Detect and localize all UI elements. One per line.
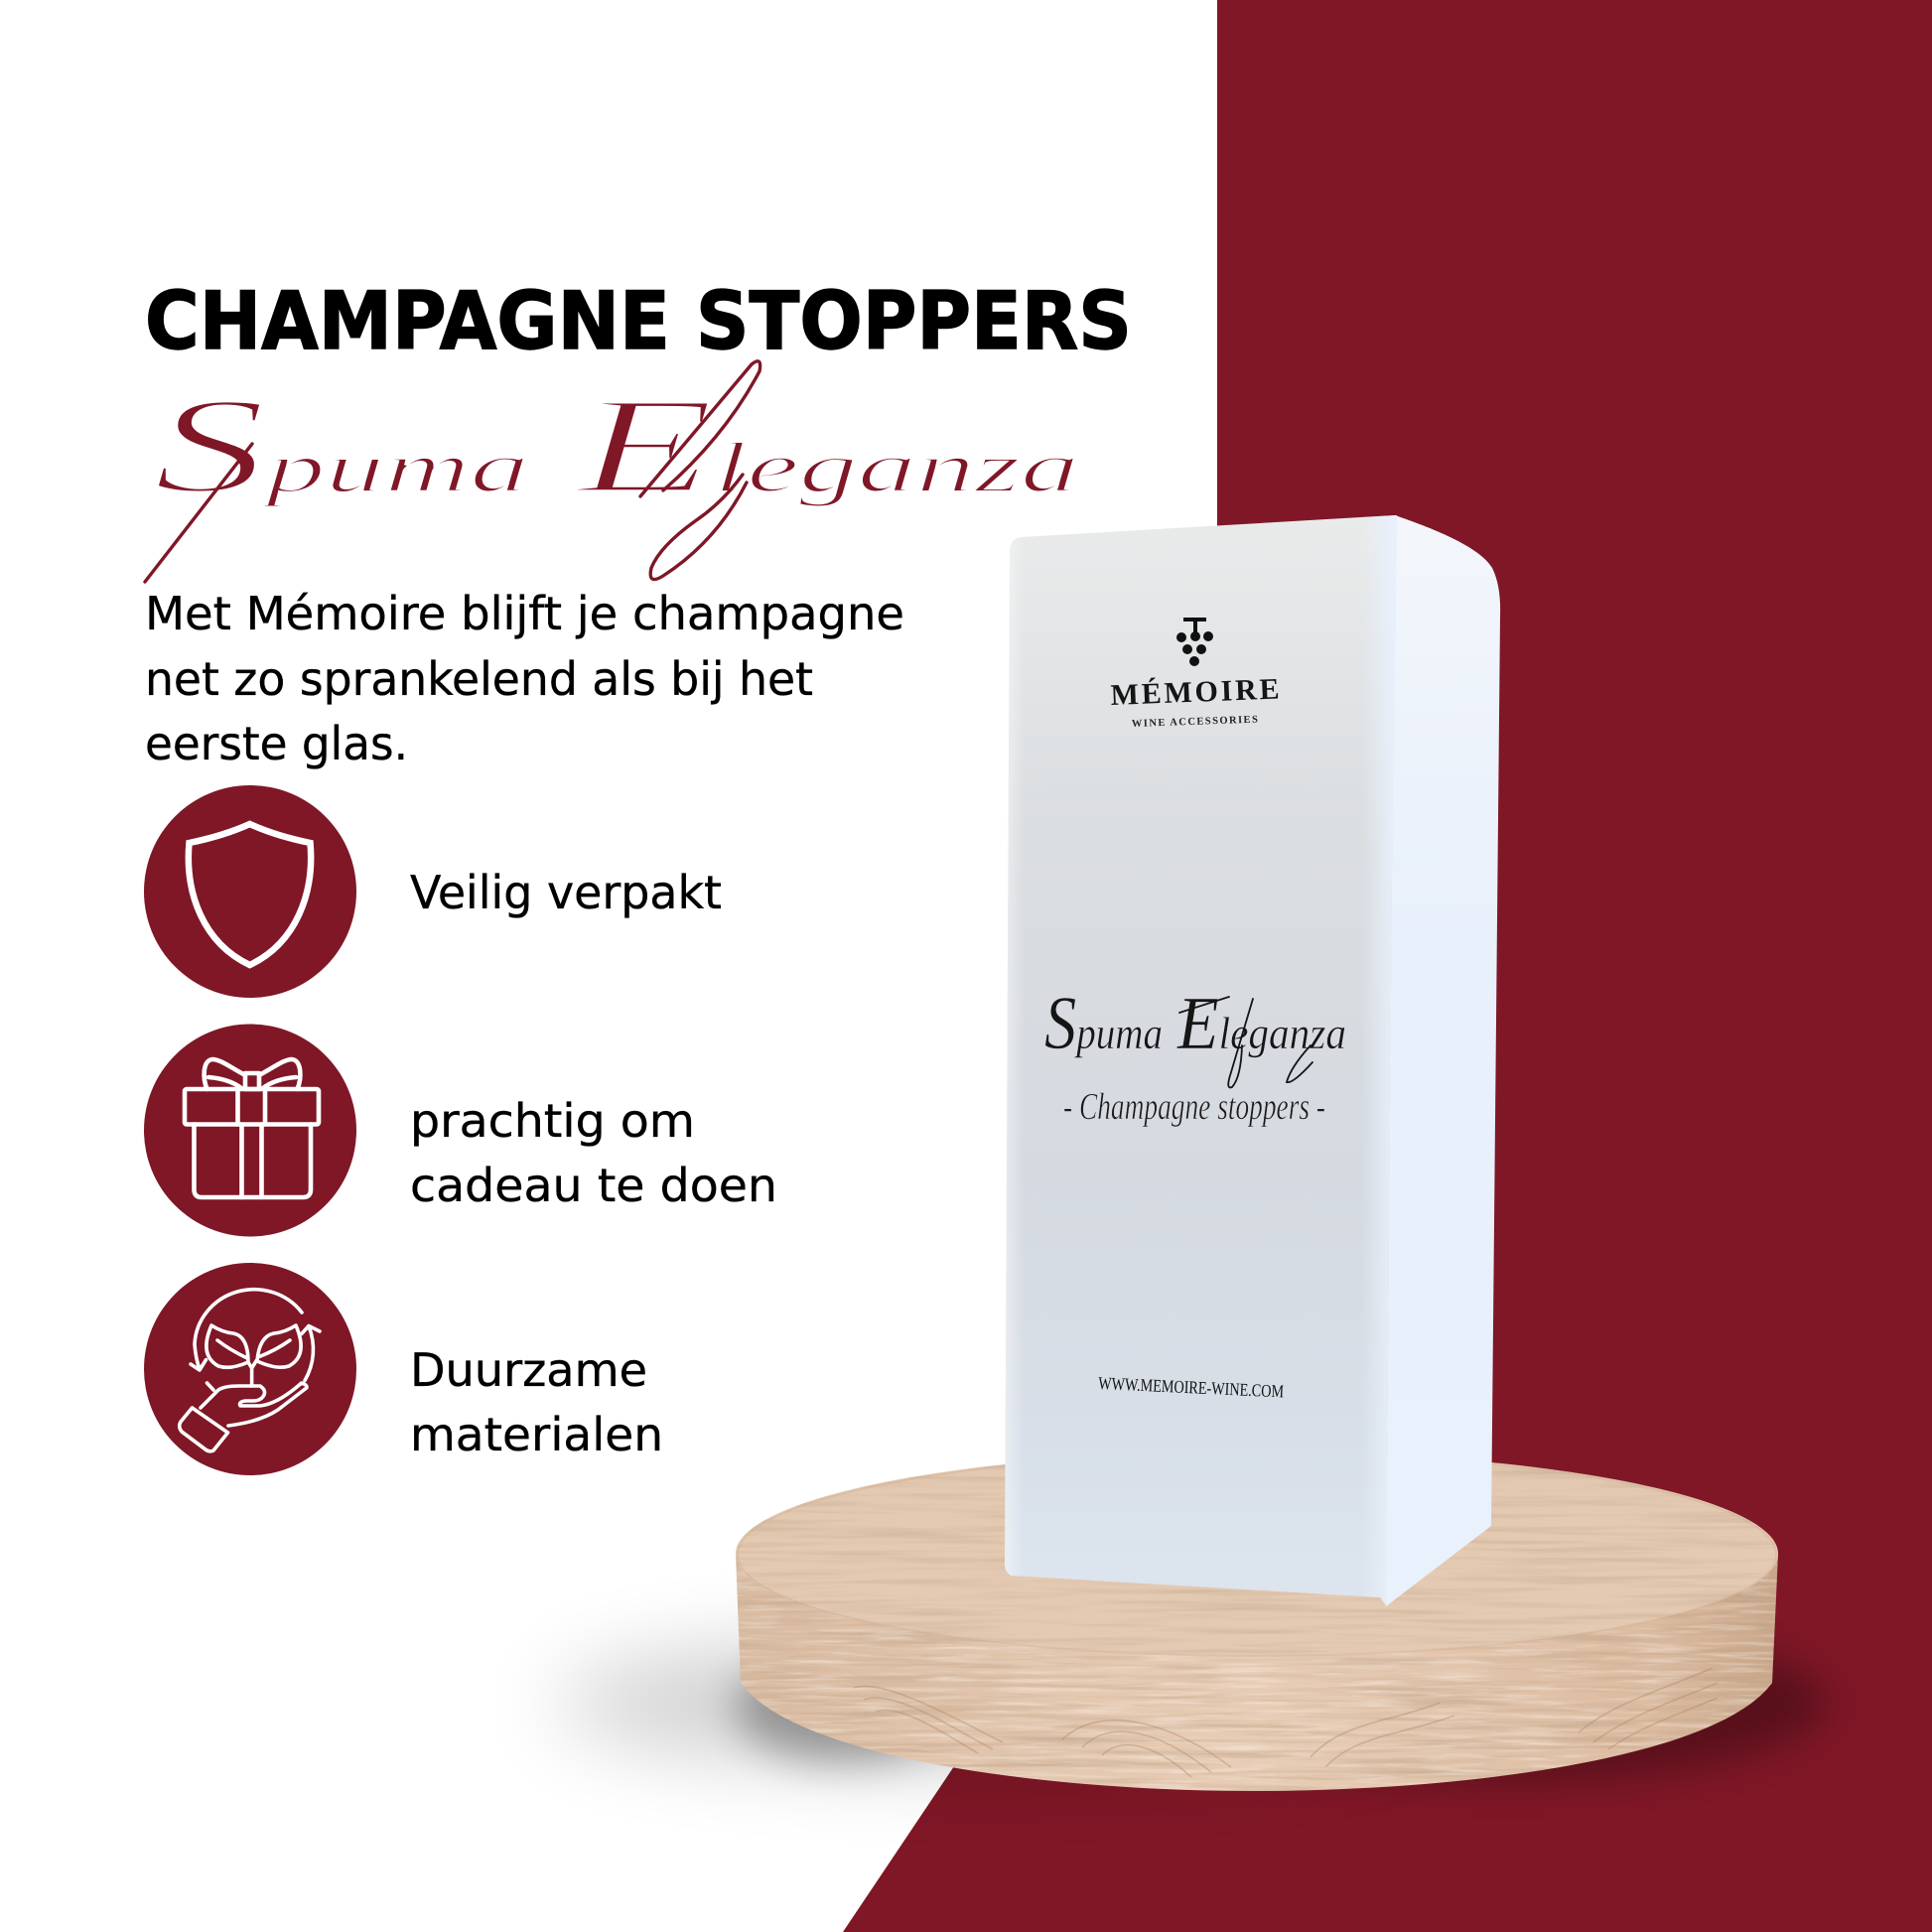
label: prachtig om — [410, 1094, 695, 1148]
product box — [1005, 515, 1500, 1606]
box right side face — [1386, 515, 1500, 1606]
box front face — [1005, 515, 1395, 1606]
script flourishes — [145, 361, 760, 582]
intro text — [145, 587, 904, 770]
icon: plant in hand — [144, 1263, 356, 1475]
title: CHAMPAGNE STOPPERS — [145, 275, 1132, 367]
intro text: Met Mémoire blijft je champagne — [145, 587, 904, 640]
intro text: net zo sprankelend als bij het — [145, 652, 813, 706]
label: cadeau te doen — [410, 1159, 777, 1212]
subtitle script: Spuma Eleganza: E leganza — [574, 369, 1079, 521]
box product name — [1044, 982, 1346, 1087]
logo: grape bunch — [1176, 618, 1213, 666]
wooden pedestal — [736, 1449, 1778, 1797]
box subtitle: - Champagne stoppers - — [1063, 1086, 1325, 1128]
brand tagline: WINE ACCESSORIES — [1132, 715, 1258, 730]
label — [410, 1343, 663, 1461]
shadow under wooden pedestal — [556, 1625, 1827, 1780]
subtitle script: Spuma Eleganza — [145, 361, 1079, 582]
label: Veilig verpakt — [410, 866, 722, 919]
intro text: eerste glas. — [145, 717, 408, 770]
box website: WWW.MEMOIRE-WINE.COM — [1098, 1373, 1285, 1401]
feature: veilig verpakt — [144, 785, 722, 998]
subtitle script: Spuma Eleganza: S puma — [153, 369, 529, 521]
box product name: Spuma — [1044, 982, 1163, 1065]
box product name: Eleganza — [1176, 982, 1346, 1065]
icon: gift — [144, 1025, 356, 1237]
box script flourishes — [1179, 997, 1312, 1087]
label — [410, 1094, 777, 1212]
label: materialen — [410, 1408, 663, 1461]
box front highlight — [1005, 515, 1397, 1606]
brand name: MÉMOIRE — [1110, 672, 1280, 712]
icon: shield — [144, 785, 356, 998]
feature: duurzaam — [144, 1263, 663, 1475]
feature: cadeau — [144, 1025, 777, 1237]
label: Duurzame — [410, 1343, 647, 1397]
panel: burgundy background — [843, 0, 1932, 1932]
